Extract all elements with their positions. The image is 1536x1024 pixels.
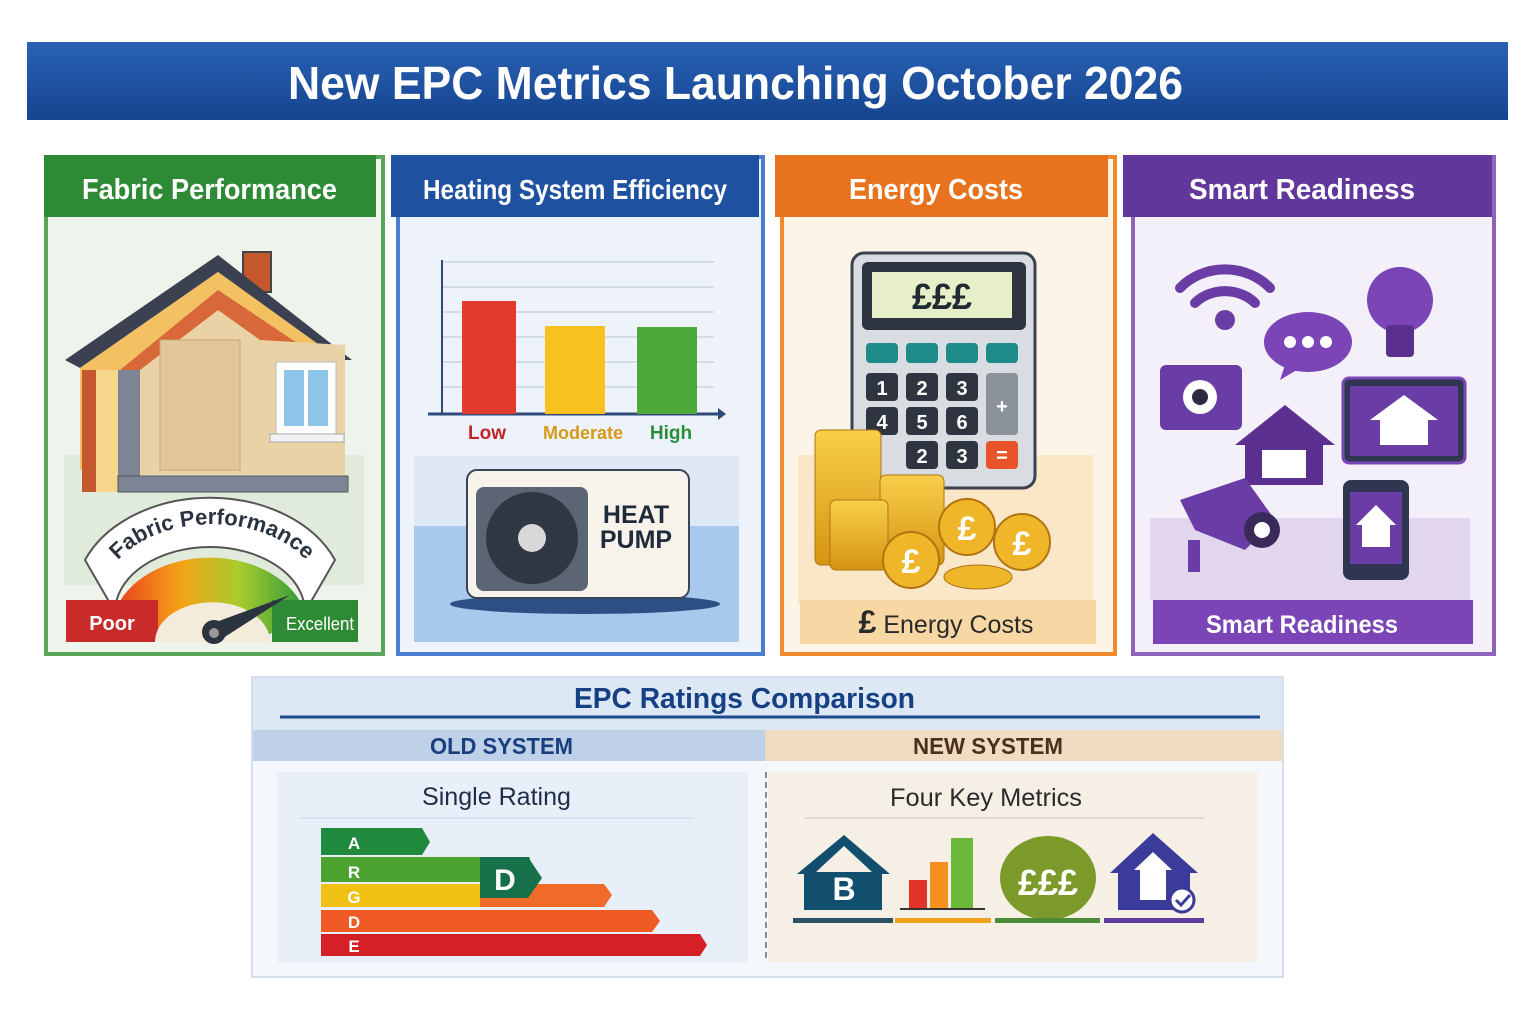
icon: bar chart — [895, 838, 991, 923]
heading: new system: NEW SYSTEM — [913, 733, 1063, 759]
heading: fabric performance — [44, 155, 376, 217]
bar chart: efficiency — [428, 260, 726, 444]
label: smart readiness caption: Smart Readiness — [1206, 611, 1398, 639]
icon: calculator and coins: + — [996, 396, 1008, 418]
icon: calculator and coins: 2 — [916, 446, 928, 468]
icon: calculator and coins: £ — [1013, 525, 1032, 563]
icon: heat pump: HEAT — [603, 501, 669, 529]
heading: old system: OLD SYSTEM — [430, 733, 573, 759]
icon: calculator and coins: 6 — [956, 412, 968, 434]
panel: single rating — [277, 772, 748, 962]
icon: smart devices — [1150, 267, 1470, 600]
heading: smart readiness — [1123, 155, 1492, 217]
chart: EPC rating bars: G — [347, 888, 361, 907]
heading: smart readiness: Smart Readiness — [1189, 174, 1415, 206]
heading: comparison — [253, 678, 1282, 730]
chart: EPC rating bars: R — [348, 863, 360, 882]
icon: heat pump — [414, 456, 739, 642]
icon: cost egg — [995, 836, 1100, 923]
panel: smart readiness — [1123, 155, 1494, 654]
icon: calculator and coins: 1 — [876, 378, 888, 400]
icon: calculator and coins: 4 — [876, 412, 888, 434]
chart: fabric gauge — [66, 496, 358, 644]
panel: four key metrics: Four Key Metrics — [890, 784, 1082, 812]
chart: fabric gauge: Fabric Performance — [108, 508, 312, 560]
icon: calculator and coins: = — [996, 445, 1008, 467]
icon: house B: B — [832, 871, 856, 907]
panel: energy costs — [775, 155, 1115, 654]
panel: heating system efficiency — [391, 155, 763, 654]
icon: calculator and coins: 3 — [956, 446, 968, 468]
panel: four key metrics — [768, 772, 1258, 962]
icon: insulated house — [64, 252, 364, 585]
icon: calculator and coins — [798, 253, 1093, 605]
icon: cost egg: £££ — [1018, 862, 1078, 903]
chart: EPC rating bars: A — [348, 834, 360, 853]
panel: fabric performance — [44, 155, 385, 656]
heading: fabric performance: Fabric Performance — [82, 174, 337, 206]
heading: new system — [765, 730, 1282, 761]
label: smart readiness caption — [1153, 600, 1473, 644]
bar chart: efficiency: Low — [468, 423, 506, 444]
bar chart: efficiency: Moderate — [543, 423, 623, 443]
icon: calculator and coins: £££ — [912, 276, 972, 317]
title banner: New EPC Metrics Launching October 2026 — [288, 57, 1183, 109]
chart: EPC rating bars: D — [494, 864, 516, 897]
label: energy costs caption — [800, 600, 1096, 644]
heading: comparison: EPC Ratings Comparison — [574, 683, 915, 715]
icon: calculator and coins: 5 — [916, 412, 928, 434]
panel: EPC ratings comparison — [252, 677, 1283, 977]
icon: smart house tick — [1104, 833, 1204, 923]
heading: old system — [253, 730, 765, 761]
heading: heating: Heating System Efficiency — [423, 174, 727, 205]
icon: calculator and coins: £ — [958, 510, 977, 548]
chart: EPC rating bars: D — [348, 913, 360, 932]
title banner — [27, 42, 1508, 120]
chart: EPC rating bars — [321, 828, 707, 956]
heading: heating — [391, 155, 759, 217]
panel: single rating: Single Rating — [422, 783, 571, 811]
label: energy costs caption: £ Energy Costs — [859, 604, 1033, 640]
heading: energy costs: Energy Costs — [849, 174, 1023, 206]
chart: fabric gauge: Excellent — [286, 614, 354, 634]
icon: calculator and coins: 2 — [916, 378, 928, 400]
bar chart: efficiency: High — [650, 423, 692, 444]
heading: energy costs — [775, 155, 1108, 217]
icon: calculator and coins: £ — [902, 543, 921, 581]
icon: heat pump: PUMP — [600, 526, 672, 554]
chart: fabric gauge: Poor — [89, 613, 135, 635]
icon: house B — [793, 835, 893, 923]
icon: calculator and coins: 3 — [956, 378, 968, 400]
chart: EPC rating bars: E — [348, 937, 360, 956]
